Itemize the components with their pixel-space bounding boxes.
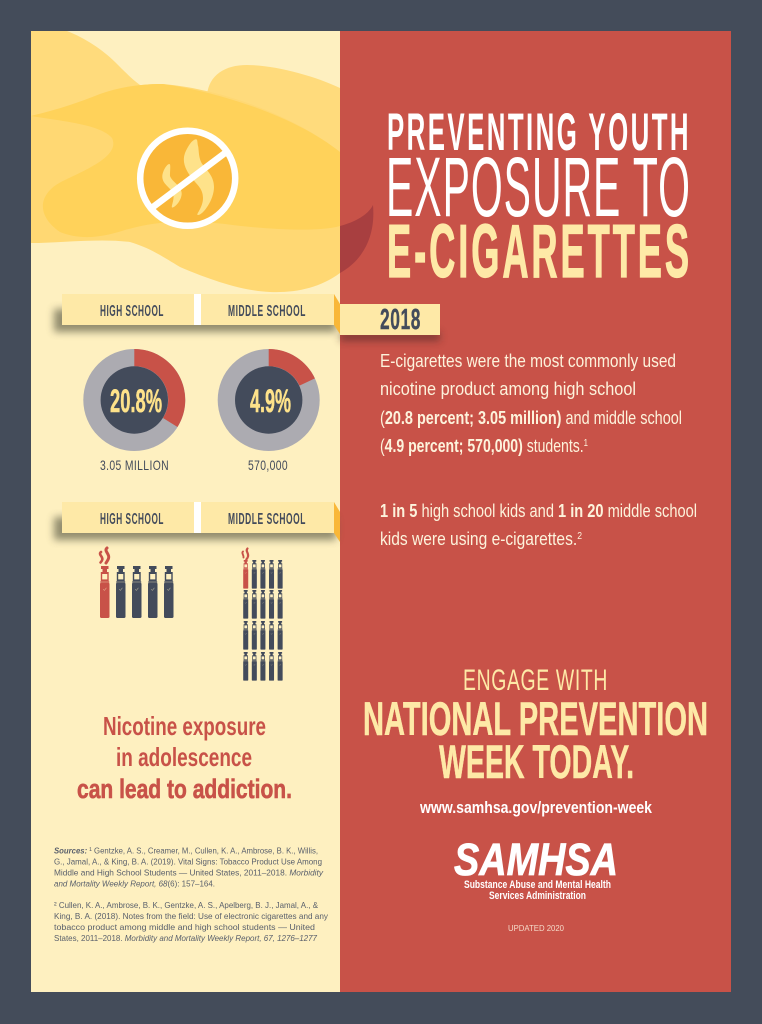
callout: nicotine exposure: can lead to addiction. bbox=[77, 774, 292, 804]
tag shadow bbox=[340, 332, 440, 341]
label: 570,000: 570,000 bbox=[248, 457, 288, 473]
sources: and Mortality Weekly Report, 68(6): 157–164. bbox=[54, 878, 215, 888]
panel: left cream bbox=[31, 31, 340, 992]
body text: 2018 statistics: (20.8 percent; 3.05 million) and middle school bbox=[380, 408, 682, 428]
pictogram: high school 1 in 5 bbox=[100, 548, 174, 618]
ribbon: top headers bbox=[62, 294, 340, 334]
call to action: WEEK TODAY. bbox=[439, 735, 634, 788]
body text: 2018 statistics bbox=[380, 351, 682, 456]
donut: middle school 4.9% bbox=[218, 349, 320, 451]
body text: 2018 statistics: (4.9 percent; 570,000) students. bbox=[380, 436, 601, 456]
call to action bbox=[363, 664, 708, 788]
donut: high school 20.8%: 20.8% bbox=[110, 383, 162, 419]
smoke cloud background bbox=[31, 31, 373, 292]
label: 3.05 million: 3.05 MILLION bbox=[100, 457, 169, 473]
body text: 1 in 5 bbox=[380, 501, 697, 549]
ribbon: lower headers bbox=[62, 502, 340, 542]
callout: nicotine exposure: Nicotine exposure bbox=[103, 711, 266, 741]
donut: high school 20.8% bbox=[83, 349, 185, 451]
call to action: ENGAGE WITH bbox=[463, 664, 608, 697]
ribbon: lower headers: MIDDLE SCHOOL bbox=[228, 511, 306, 528]
logo: SAMHSA: SAMHSA bbox=[454, 834, 618, 885]
title bbox=[386, 103, 692, 293]
callout: nicotine exposure bbox=[77, 711, 292, 804]
pictogram: middle school 1 in 20 bbox=[242, 548, 283, 681]
sources bbox=[54, 846, 329, 943]
icon: no smoking flames bbox=[140, 131, 235, 226]
body text: 1 in 5: kids were using e-cigarettes. bbox=[380, 529, 608, 549]
sources: Sources: ¹ Gentzke, A. S., Creamer, M., Cullen, K. A., Ambrose, B. K., Willis, bbox=[54, 846, 318, 856]
callout: nicotine exposure: in adolescence bbox=[116, 742, 252, 772]
website link: www.samhsa.gov/prevention-week bbox=[419, 798, 652, 817]
ribbon shadow lower bbox=[54, 517, 336, 540]
logo: SAMHSA: Substance Abuse and Mental Health bbox=[464, 879, 611, 891]
year tag 2018 bbox=[340, 304, 440, 336]
sources: G., Jamal, A., & King, B. A. (2019). Vital Signs: Tobacco Product Use Among bbox=[54, 856, 322, 866]
logo: SAMHSA: Services Administration bbox=[489, 890, 586, 902]
sources: ² Cullen, K. A., Ambrose, B. K., Gentzke, A. S., Apelberg, B. J., Jamal, A., & bbox=[54, 900, 318, 910]
sources: Middle and High School Students — United States, 2011–2018. Morbidity bbox=[54, 868, 324, 878]
body text: 2018 statistics: E-cigarettes were the most commonly used bbox=[380, 351, 676, 371]
body text: 1 in 5: 2 bbox=[577, 531, 582, 542]
body text: 1 in 5: 1 in 5 high school kids and 1 in 20 middle school bbox=[380, 501, 697, 521]
sources: King, B. A. (2018). Notes from the field: Use of electronic cigarettes and any bbox=[54, 911, 329, 921]
year tag 2018: 2018 bbox=[380, 304, 421, 336]
panel: right red bbox=[340, 31, 731, 992]
ribbon: lower headers: HIGH SCHOOL bbox=[100, 511, 164, 528]
body text: 2018 statistics: nicotine product among high school bbox=[380, 379, 636, 399]
ribbon: top headers: HIGH SCHOOL bbox=[100, 303, 164, 320]
body text: 2018 statistics: 1 bbox=[584, 438, 588, 449]
logo: SAMHSA bbox=[454, 834, 618, 902]
ribbon: top headers: MIDDLE SCHOOL bbox=[228, 303, 306, 320]
ribbon shadow top bbox=[54, 309, 336, 332]
sources: tobacco product among middle and high school students — United bbox=[54, 922, 315, 932]
updated date: UPDATED 2020 bbox=[508, 924, 565, 933]
sources: States, 2011–2018. Morbidity and Mortality Weekly Report, 67, 1276–1277 bbox=[54, 933, 318, 943]
donut: middle school 4.9%: 4.9% bbox=[250, 383, 291, 419]
